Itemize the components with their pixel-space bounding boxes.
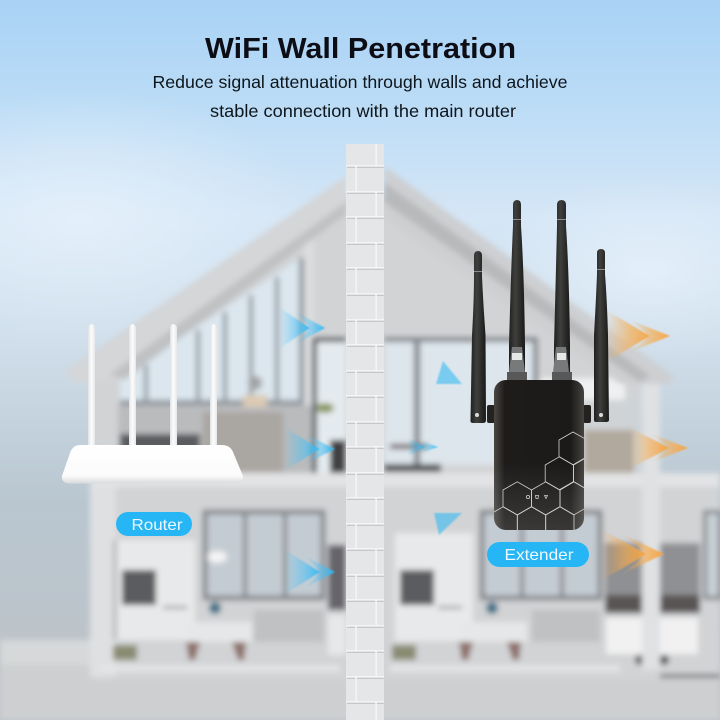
orange arrow 2 — [630, 428, 688, 468]
left floor room right glass — [314, 338, 346, 473]
blue arrow through wall 3 — [434, 513, 462, 535]
router label — [116, 512, 192, 536]
right balcony — [605, 543, 700, 603]
blue arrow 3 — [285, 550, 335, 594]
extender label — [487, 542, 589, 567]
blue arrow 2 — [285, 428, 335, 470]
blue arrow through wall 2 — [408, 438, 438, 456]
left upper room — [118, 405, 318, 473]
antenna rings and connectors — [474, 219, 605, 272]
hexagon pattern — [494, 432, 584, 530]
extender antennas — [470, 200, 609, 423]
orange arrow 1 — [606, 310, 670, 362]
extender body — [494, 380, 584, 530]
blue arrow 1 — [280, 308, 325, 348]
extender — [470, 200, 609, 540]
brick wall — [346, 144, 384, 720]
router label: Router — [132, 517, 183, 534]
floor slab — [90, 473, 720, 487]
subtitle: Reduce signal attenuation through walls and achieve — [152, 72, 568, 92]
blue arrow through wall 1 — [436, 361, 462, 384]
right table — [461, 622, 527, 642]
indicator icons — [526, 495, 548, 499]
roof right — [384, 166, 676, 384]
left attic windows — [120, 258, 300, 403]
extender label: Extender — [504, 547, 574, 564]
title: WiFi Wall Penetration — [205, 33, 516, 65]
subtitle — [152, 72, 568, 121]
right lower window — [482, 512, 600, 598]
left fridge — [117, 540, 195, 640]
left lower window — [205, 512, 323, 598]
left table — [186, 622, 252, 642]
subtitle: stable connection with the main router — [210, 101, 516, 121]
router — [62, 324, 243, 484]
router antennas — [88, 324, 217, 447]
left pillar — [304, 220, 314, 480]
right fridge — [395, 533, 473, 641]
roof left — [64, 176, 346, 384]
router body — [62, 445, 243, 484]
background: blurred house — [0, 166, 720, 720]
ground — [0, 640, 720, 665]
gable wall — [92, 195, 720, 680]
right upper glass — [384, 340, 534, 465]
orange arrow 3 — [602, 530, 664, 580]
